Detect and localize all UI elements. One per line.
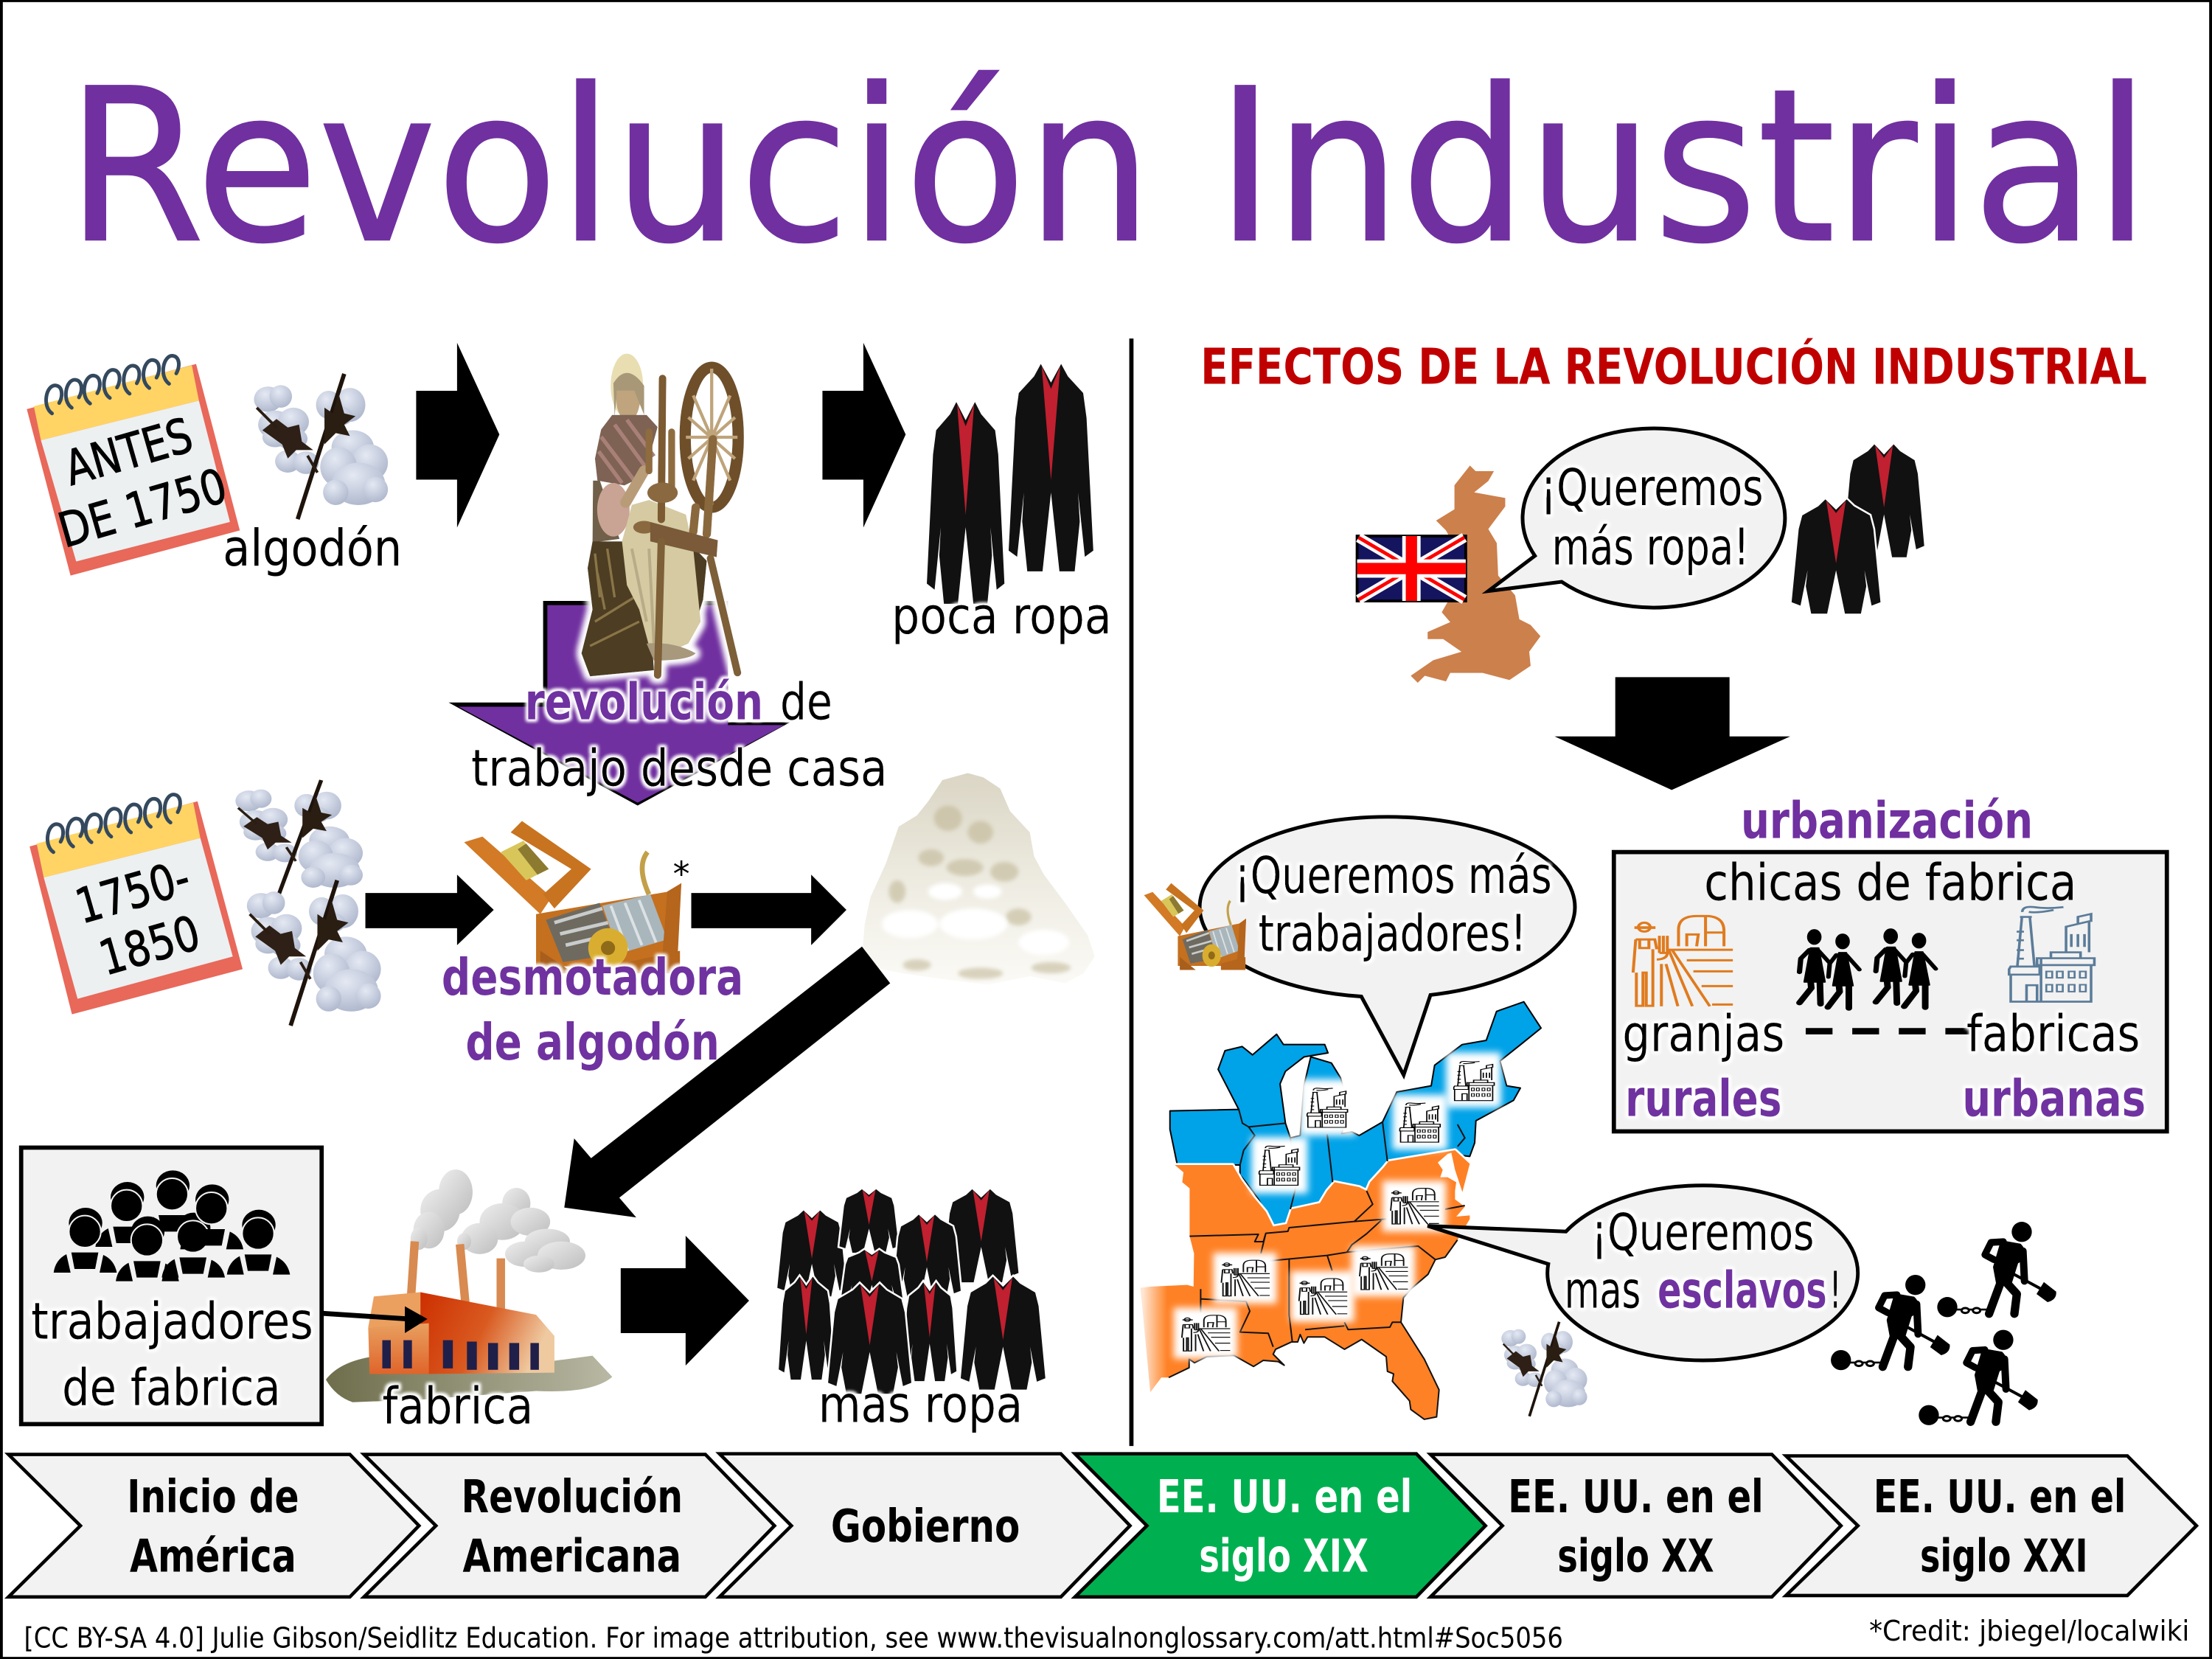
panel: effects of the Industrial Revolution (right) <box>1141 337 2167 1425</box>
chevron: Inicio de América: América <box>130 1530 296 1582</box>
label: trabajadores de fabrica <box>31 1293 313 1418</box>
callout: we want more clothes: ¡Queremos <box>1540 459 1764 518</box>
panel: history of cotton production (left) <box>21 343 1112 1436</box>
timeline navigation chevrons <box>8 1454 2197 1597</box>
icon: cotton gin machine <box>464 821 681 973</box>
icon: calendar before 1750: DE 1750 <box>52 459 233 559</box>
image: woman at spinning wheel <box>582 354 738 676</box>
panel: factory workers <box>21 1147 321 1424</box>
icon: many suits <box>777 1189 1046 1394</box>
icon: cotton plant <box>254 374 388 519</box>
panel: factory girls urbanization <box>1614 852 2167 1131</box>
chevron: Inicio de América <box>8 1455 419 1597</box>
label: desmotadora de algodón: desmotadora <box>442 948 743 1007</box>
icon: small cotton gin <box>1144 883 1246 970</box>
chevron: EE. UU. en el siglo XX <box>1430 1455 1841 1597</box>
chevron: Inicio de América: Inicio de <box>127 1471 299 1523</box>
label: fabricas urbanas <box>1962 1004 2146 1128</box>
icon: two cotton plants <box>235 780 381 1026</box>
label: poca ropa: poca ropa <box>891 587 1112 646</box>
divider between panels <box>1130 338 1133 1446</box>
map: state borders <box>1169 1110 1465 1419</box>
label: revolución de trabajo desde casa: revolución <box>525 673 763 732</box>
arrow: purple revolution arrow <box>448 601 790 805</box>
chevron: Revolución Americana <box>364 1455 774 1597</box>
chevron: Revolución Americana: Revolución <box>462 1471 683 1523</box>
icon: group of workers <box>54 1170 290 1281</box>
icon: small cotton plant <box>1501 1322 1587 1416</box>
arrow: workers into factory <box>323 1307 428 1333</box>
chevron: EE. UU. en el siglo XXI: siglo XXI <box>1920 1530 2088 1582</box>
label: revolución de trabajo desde casa: de <box>780 673 832 732</box>
chevron: EE. UU. en el siglo XXI <box>1786 1455 2197 1596</box>
label: granjas rurales: rurales <box>1625 1069 1781 1128</box>
label: fabricas urbanas: fabricas <box>1966 1004 2140 1063</box>
map: northern states <box>1170 1002 1541 1226</box>
label: fabrica: fabrica <box>382 1377 533 1436</box>
chevron: EE. UU. en el siglo XIX (active): siglo XIX <box>1199 1530 1368 1582</box>
icon: two suits <box>927 364 1093 604</box>
label: trabajadores de fabrica: de fabrica <box>62 1359 281 1418</box>
chevron: Gobierno: Gobierno <box>831 1500 1020 1553</box>
icon: urban factory <box>2009 907 2094 1002</box>
label: algodón: algodón <box>223 519 402 578</box>
arrow: down to effects <box>1554 677 1790 790</box>
arrow: cotton to gin <box>366 874 494 945</box>
label: granjas rurales <box>1622 1004 1784 1128</box>
icon: calendar before 1750: ANTES <box>59 408 198 497</box>
icon: calendar 1750-1850: 1850 <box>94 905 206 987</box>
arrow: gin to clean cotton <box>692 874 846 945</box>
asterisk credit mark: * <box>673 855 690 894</box>
label: revolución de trabajo desde casa: trabajo desde casa <box>471 740 887 799</box>
map: eastern United States north and south <box>1141 1002 1541 1419</box>
callout: we want more slaves: ¡Queremos <box>1591 1203 1814 1262</box>
icon: two suits <box>1792 445 1924 613</box>
callout: we want more clothes <box>1488 428 1785 608</box>
icon: calendar 1750-1850: 1750- <box>70 850 196 935</box>
label: mas ropa: mas ropa <box>818 1376 1023 1435</box>
chevron: Revolución Americana: Americana <box>463 1530 681 1582</box>
icons: factories in the north <box>1251 1052 1501 1194</box>
callout: we want more clothes: más ropa! <box>1552 518 1749 577</box>
footer: attribution: [CC BY-SA 4.0] Julie Gibson/Seidlitz Education. For image attribution, see www.thevisualnonglossary.com/att.html#Soc5056 <box>24 1622 1563 1655</box>
callout: we want more slaves <box>1427 1186 1858 1360</box>
chevron: EE. UU. en el siglo XIX (active): EE. UU. en el <box>1157 1471 1412 1523</box>
icon: calendar before 1750 <box>27 355 240 576</box>
icon: enslaved workers with shovels and chains <box>1831 1222 2056 1425</box>
chevron: Gobierno <box>720 1454 1130 1597</box>
arrow: dashed rural to urban <box>1806 1029 1969 1033</box>
image: cleaned cotton pile <box>862 773 1095 984</box>
callout: we want more slaves: esclavos <box>1658 1262 1827 1321</box>
chevron: EE. UU. en el siglo XIX (active) <box>1075 1454 1486 1597</box>
label: revolución de trabajo desde casa <box>471 673 887 799</box>
icons: farms in the south <box>1174 1180 1446 1358</box>
label: trabajadores de fabrica: trabajadores <box>31 1293 313 1352</box>
chevron: EE. UU. en el siglo XX: EE. UU. en el <box>1508 1471 1764 1523</box>
arrow: factory to more clothing <box>621 1236 749 1366</box>
chevron: EE. UU. en el siglo XXI: EE. UU. en el <box>1874 1471 2126 1523</box>
callout: we want more slaves: ! <box>1830 1262 1841 1321</box>
arrow: clean cotton to factory <box>564 947 890 1217</box>
map: Great Britain <box>1411 465 1540 683</box>
icon: factory with smoke <box>326 1169 612 1402</box>
map: southern states <box>1141 1150 1470 1419</box>
label: desmotadora de algodón: de algodón <box>465 1013 720 1072</box>
icon: walking factory girls <box>1800 928 1935 1008</box>
heading: urbanización: urbanización <box>1741 791 2033 850</box>
label: fabricas urbanas: urbanas <box>1962 1069 2146 1128</box>
icon: Union Jack flag <box>1357 536 1466 601</box>
callout: we want more workers: trabajadores! <box>1259 905 1526 964</box>
callout: we want more workers: ¡Queremos más <box>1234 846 1552 905</box>
label: granjas rurales: granjas <box>1622 1004 1784 1063</box>
arrow: cotton to home spinning <box>416 343 499 528</box>
callout: we want more workers <box>1200 817 1575 1075</box>
arrow: spinning to little clothing <box>822 343 905 528</box>
label: desmotadora de algodón <box>442 948 743 1072</box>
footer: image credit: *Credit: jbiegel/localwiki <box>1869 1615 2189 1648</box>
icon: farm <box>1633 916 1733 1006</box>
callout: we want more slaves: mas <box>1565 1262 1641 1321</box>
label: chicas de fabrica: chicas de fabrica <box>1704 854 2076 913</box>
chevron: EE. UU. en el siglo XX: siglo XX <box>1557 1530 1714 1582</box>
icon: calendar 1750-1850 <box>29 793 243 1015</box>
